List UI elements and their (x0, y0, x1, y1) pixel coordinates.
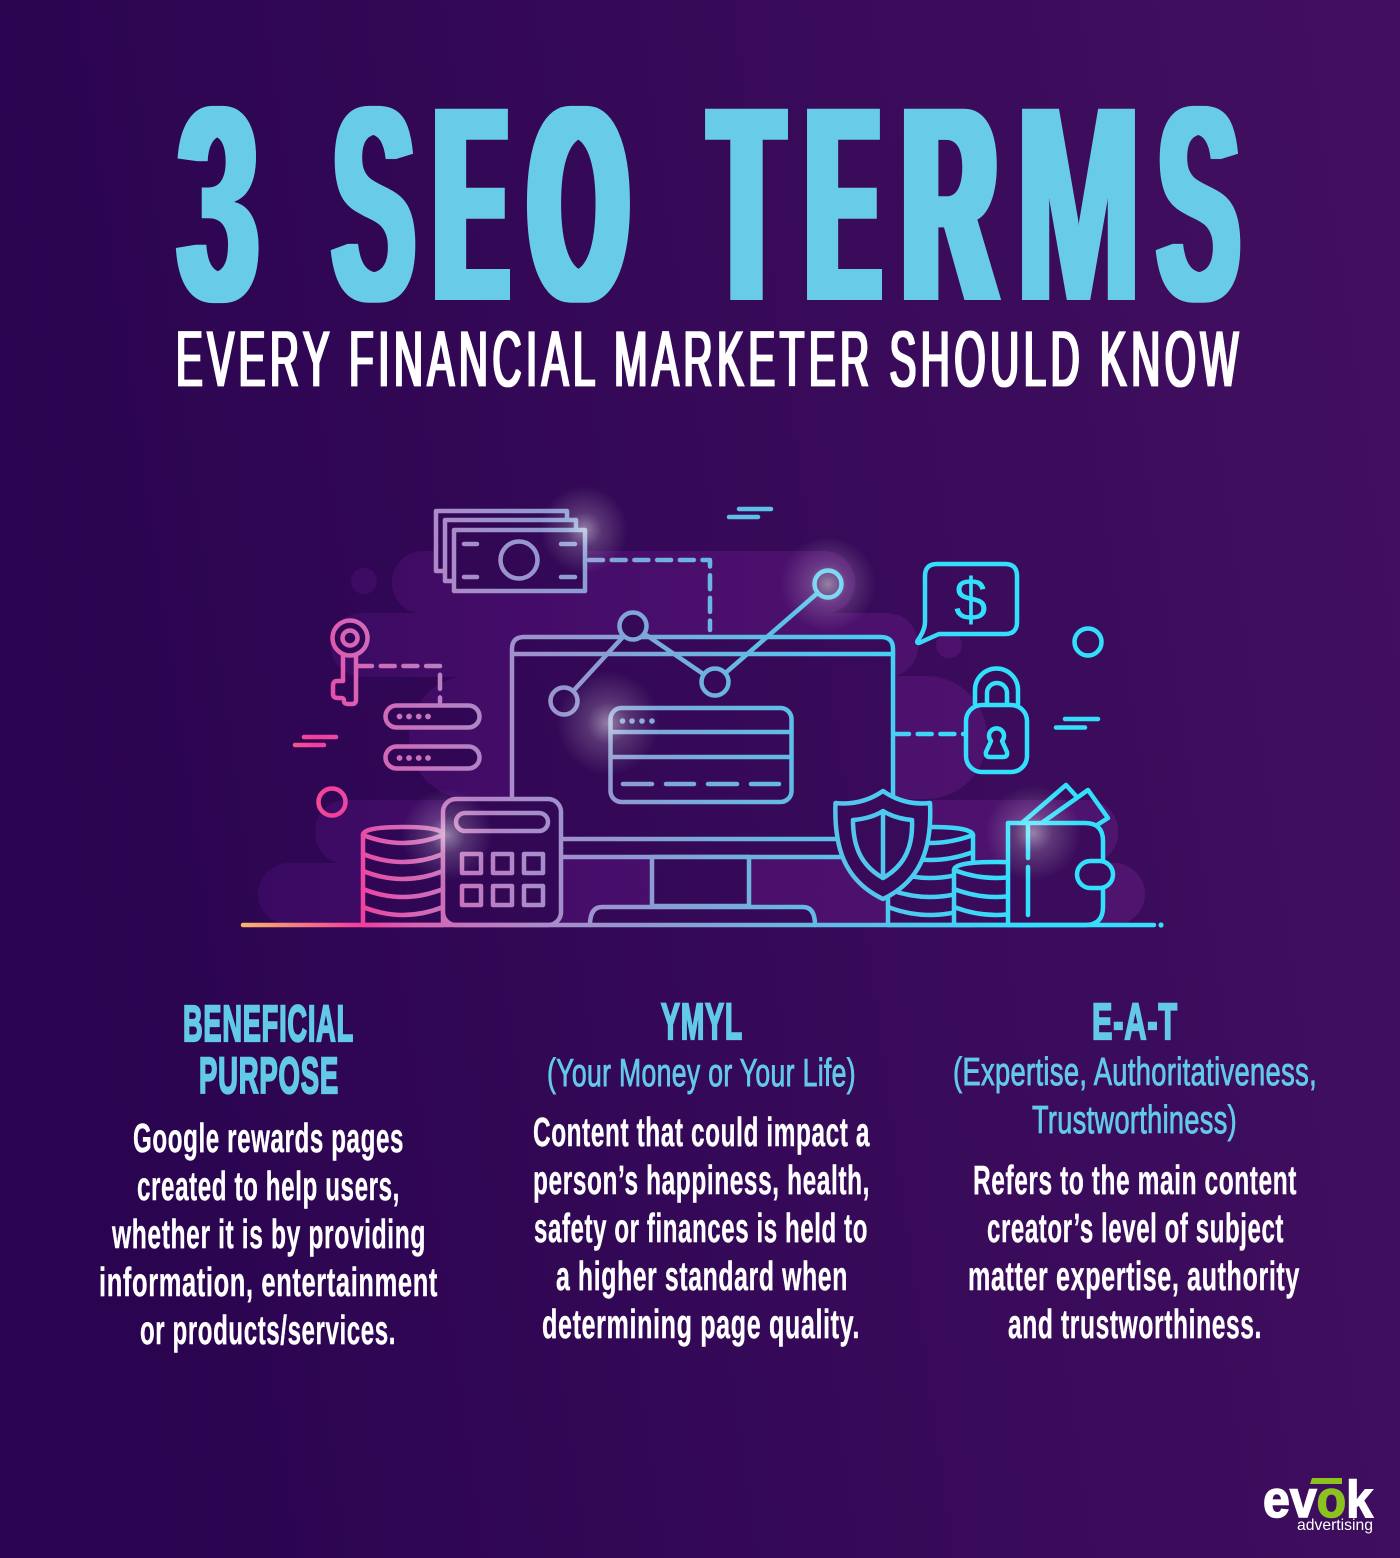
body text: beneficial purpose: or products/services. (140, 1307, 396, 1353)
icon: database (363, 827, 443, 925)
icon: shield (835, 791, 930, 899)
subheading: your money or your life: (Your Money or Your Life) (547, 1052, 856, 1095)
logo: evok advertising: advertising (1297, 1517, 1373, 1534)
body text: YMYL: a higher standard when (556, 1253, 848, 1299)
column: YMYL (533, 993, 870, 1347)
dashed connector: key to fields (358, 666, 440, 702)
icon: calculator (443, 799, 561, 925)
icon: wallet (1008, 785, 1113, 925)
title: E (808, 48, 878, 359)
icon: speech bubble with dollar: $ (954, 566, 987, 633)
heading: beneficial purpose (183, 995, 354, 1104)
heading: YMYL: YMYL (661, 993, 743, 1050)
title: 3 (178, 48, 259, 359)
dashed connector: money to monitor (589, 560, 710, 630)
body text: YMYL: determining page quality. (542, 1301, 860, 1347)
column: beneficial purpose (99, 995, 438, 1353)
title: M (1016, 48, 1141, 359)
icon: coin stacks (888, 827, 1038, 925)
body text: YMYL: person’s happiness, health, (533, 1157, 870, 1203)
illustration: finance and security scene (243, 486, 1164, 928)
line chart (550, 570, 842, 714)
body text: beneficial purpose (99, 1115, 438, 1353)
title (178, 48, 1240, 359)
icon: desktop monitor (512, 637, 893, 925)
body text: YMYL (533, 1109, 870, 1347)
body text: beneficial purpose: Google rewards pages (133, 1115, 404, 1161)
light glows (401, 486, 1081, 881)
body text: YMYL: Content that could impact a (533, 1109, 870, 1155)
title: E (436, 48, 506, 359)
dashed connector: monitor to padlock (895, 732, 964, 736)
heading: beneficial purpose: BENEFICIAL (183, 995, 354, 1052)
decorative circles and dashes (295, 509, 1102, 816)
subheading: expertise, authoritativeness, trustworthiness (953, 1051, 1317, 1142)
body text: beneficial purpose: whether it is by providing (111, 1211, 426, 1257)
subheading: expertise, authoritativeness, trustworthiness: Trustworthiness) (1032, 1099, 1237, 1142)
text: S (1157, 48, 1240, 359)
password fields (386, 706, 480, 768)
base line (243, 922, 1164, 928)
background cloud shapes (258, 551, 1145, 925)
title: R (903, 48, 996, 359)
icon: key (332, 620, 368, 704)
body text: beneficial purpose: information, entertainment (99, 1259, 438, 1305)
icon: banknotes (436, 511, 585, 591)
title: O (530, 48, 627, 359)
browser window card (610, 708, 792, 802)
body text: beneficial purpose: created to help users, (137, 1163, 400, 1209)
heading: E-A-T: E-A-T (1092, 993, 1178, 1050)
icon: speech bubble with dollar (917, 564, 1017, 643)
body text: YMYL: safety or finances is held to (534, 1205, 868, 1251)
icon: padlock (966, 668, 1027, 772)
heading: beneficial purpose: PURPOSE (199, 1047, 339, 1104)
title: S (332, 48, 415, 359)
column: E-A-T (953, 993, 1317, 1347)
title: T (712, 48, 781, 359)
logo: evok advertising: evok (1263, 1471, 1373, 1529)
body text: E-A-T (968, 1157, 1300, 1347)
